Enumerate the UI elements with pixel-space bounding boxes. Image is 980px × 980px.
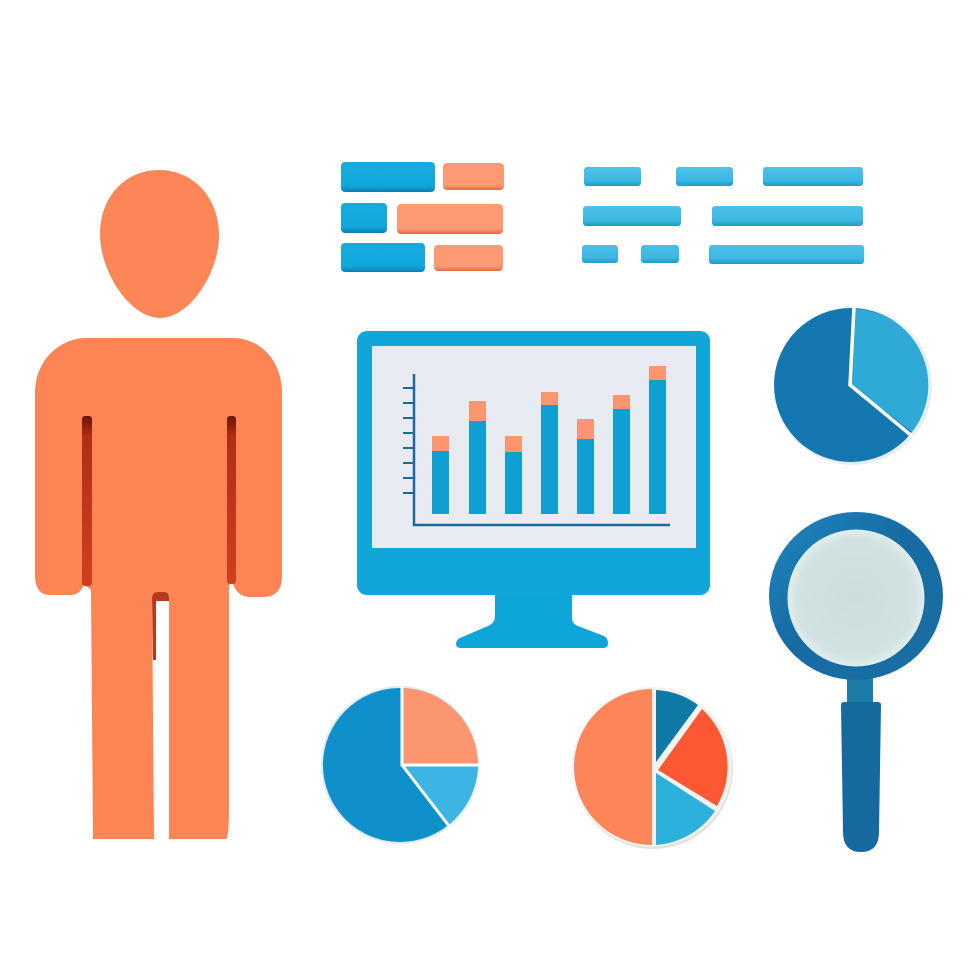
right label bars [582, 167, 864, 264]
magnifying glass [769, 512, 943, 852]
ring [769, 512, 943, 680]
right arm slit [227, 416, 236, 584]
bottom left pie chart [321, 686, 479, 844]
top right pie chart [774, 307, 932, 465]
axes [414, 374, 670, 525]
bottom right pie chart [572, 687, 733, 849]
person figure [35, 170, 282, 839]
bars [432, 380, 666, 514]
lens [788, 530, 924, 666]
leg gap shadow [152, 592, 169, 660]
left arm slit [82, 416, 92, 586]
bar caps [432, 366, 666, 452]
stand [456, 590, 608, 648]
computer monitor [357, 331, 710, 648]
handle [841, 702, 881, 852]
body [35, 338, 282, 839]
bar chart [403, 366, 670, 525]
screen [372, 346, 696, 548]
left label bars [341, 162, 504, 272]
monitor frame [357, 331, 710, 595]
head [100, 170, 219, 318]
neck [847, 676, 873, 704]
